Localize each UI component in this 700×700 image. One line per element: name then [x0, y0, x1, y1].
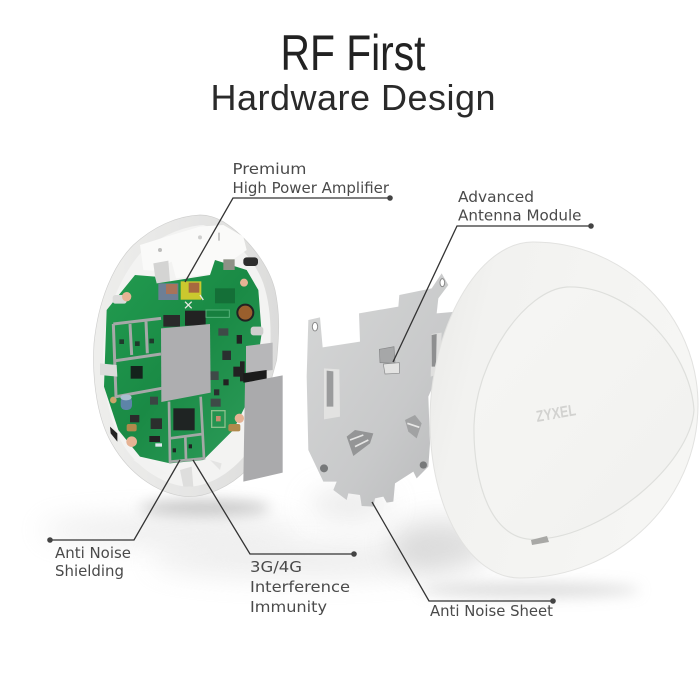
- callout: 3G/4G interference immunity: Immunity: [250, 598, 327, 616]
- callout: anti noise sheet: Anti Noise Sheet: [430, 602, 553, 620]
- device base with circuit board: [94, 215, 283, 497]
- callout: premium high power amplifier: Premium: [232, 160, 306, 178]
- top clips: [140, 225, 247, 278]
- lower shield frame with chips: [169, 397, 204, 462]
- large metal shield plate: [161, 324, 211, 402]
- capacitor: [121, 397, 132, 410]
- left ribbon: [100, 363, 117, 377]
- callout: 3G/4G interference immunity: [193, 460, 357, 616]
- foil shield tab: [243, 375, 283, 482]
- callout: premium high power amplifier: [185, 160, 393, 282]
- white shell: [94, 215, 279, 497]
- mounting holes: [312, 322, 318, 331]
- inductors and chips: [163, 315, 180, 327]
- power amplifier components: [158, 283, 178, 300]
- metal antenna plate: [307, 273, 457, 507]
- callout: premium high power amplifier: High Power Amplifier: [232, 179, 390, 197]
- dome cover: [430, 242, 698, 578]
- callout: advanced antenna module: Advanced: [458, 188, 534, 206]
- callout: 3G/4G interference immunity: 3G/4G: [250, 558, 302, 576]
- left vertical clip: [324, 368, 340, 419]
- antenna module tab: [379, 347, 395, 363]
- screw standoff top right: [243, 257, 258, 266]
- status light slot: [531, 536, 549, 545]
- right vertical clip: [431, 333, 442, 377]
- callout: anti noise shielding: Anti Noise: [55, 544, 131, 562]
- upright standoff and metal tab: [251, 327, 263, 335]
- upper left shield frame: [113, 318, 162, 397]
- callout: anti noise sheet: [372, 502, 556, 620]
- shell inner recess: [103, 225, 271, 487]
- title: Hardware Design: [210, 77, 496, 118]
- callout: anti noise shielding: Shielding: [55, 562, 124, 580]
- green circuit board: [104, 260, 262, 463]
- callout: advanced antenna module: [393, 188, 594, 362]
- callout: 3G/4G interference immunity: Interference: [250, 578, 350, 596]
- logo: ZYXEL: [535, 402, 577, 426]
- left standoff: [113, 295, 127, 304]
- title: RF First: [280, 25, 426, 81]
- RF pad: [212, 411, 225, 427]
- callout: anti noise shielding: [47, 460, 180, 580]
- callout: advanced antenna module: Antenna Module: [458, 206, 582, 224]
- lower clips: [133, 458, 167, 477]
- title: [210, 25, 496, 118]
- lower bent tabs: [347, 430, 373, 456]
- ground shadows: [40, 491, 640, 597]
- cover top face: [474, 287, 694, 539]
